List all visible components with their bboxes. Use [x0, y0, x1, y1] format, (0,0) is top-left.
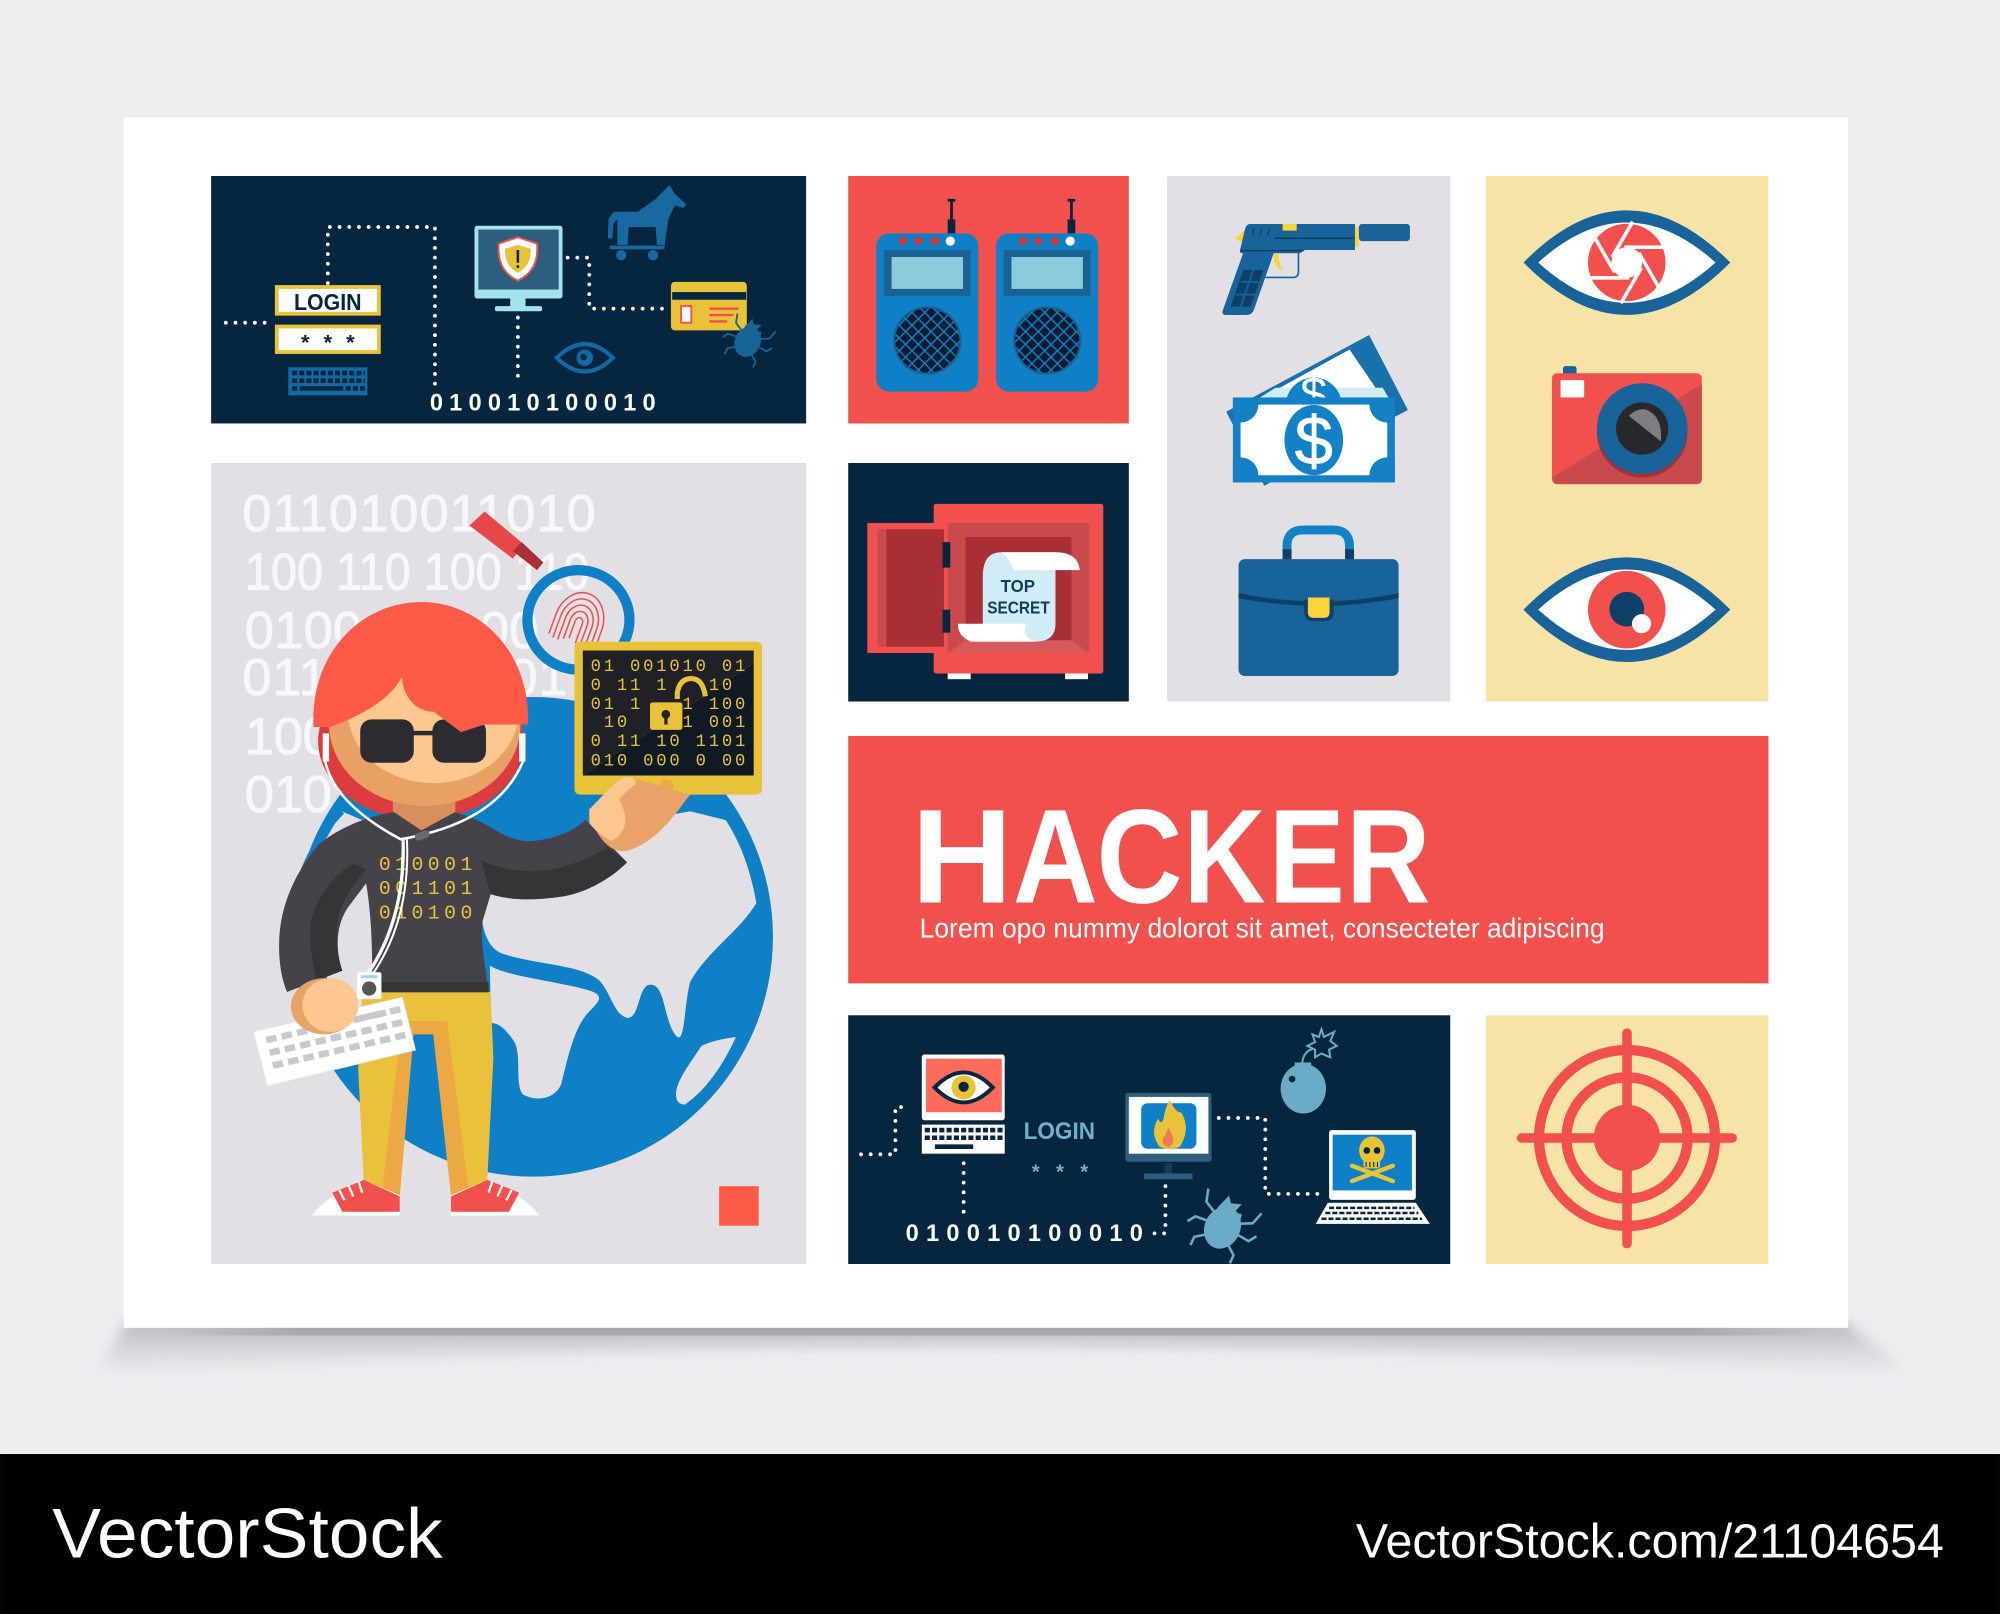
panel: target — [1486, 1015, 1768, 1264]
icon: briefcase — [1239, 530, 1399, 676]
card shadow — [94, 1321, 1913, 1375]
legs — [358, 992, 493, 1196]
hair — [313, 602, 528, 732]
background binary digits: 100 110 100 110 — [245, 543, 589, 601]
panel: safe — [848, 463, 1129, 702]
scroll top secret — [958, 552, 1080, 642]
hoodie binary text: 010001 — [379, 854, 477, 876]
monitor with flame — [1125, 1093, 1211, 1179]
footer bar — [0, 1454, 2000, 1614]
heading: H — [911, 783, 1013, 932]
heading: R — [1346, 781, 1431, 931]
keyboard icon — [288, 367, 367, 395]
white card — [124, 117, 1848, 1328]
monitor with shield — [474, 226, 563, 311]
hoodie binary text: 001101 — [379, 878, 477, 900]
character: hacker — [253, 602, 627, 1216]
safe door — [867, 523, 950, 653]
background binary digits: 010 — [245, 766, 332, 824]
right hand — [589, 777, 690, 851]
icon: credit card — [671, 282, 747, 330]
password field — [277, 327, 379, 354]
face — [329, 640, 520, 806]
icon: bomb — [1281, 1029, 1337, 1113]
binary text: 010010100010 — [430, 390, 656, 416]
heading: K — [1183, 782, 1266, 932]
tablet binary text: 01 1 1 100 — [591, 696, 748, 715]
icon: gun — [1222, 224, 1410, 315]
icon: crosshair target — [1522, 1033, 1732, 1244]
heading: C — [1096, 781, 1182, 931]
background binary digits: 0100100100 — [245, 602, 538, 660]
background binary digits: 100 — [245, 708, 332, 766]
icon: shutter eye — [1523, 210, 1730, 315]
heading — [911, 781, 1431, 932]
mic — [414, 829, 431, 842]
dotted connectors — [861, 1107, 1321, 1233]
icon: trojan horse — [608, 185, 686, 260]
earphones and wire — [323, 733, 526, 974]
neck — [393, 791, 455, 832]
background binary digits — [242, 485, 596, 824]
icon: red iris eye — [1523, 557, 1730, 662]
subtitle: Lorem opo nummy dolorot sit amet, consecteter adipiscing — [920, 912, 1605, 943]
icon: banknotes — [1223, 335, 1408, 493]
left hand — [291, 978, 358, 1034]
shoes — [312, 1180, 539, 1216]
tablet binary text: 010 000 0 00 — [591, 752, 748, 771]
scroll top secret: SECRET — [987, 598, 1050, 618]
login label: LOGIN — [1024, 1118, 1095, 1144]
password asterisks — [1032, 1162, 1088, 1184]
keyboard — [922, 1125, 1005, 1154]
panel: eyes and camera — [1486, 176, 1768, 702]
icon: bug — [1179, 1184, 1267, 1269]
magnifier with fingerprint — [469, 511, 629, 670]
panel: walkie talkies — [848, 176, 1129, 423]
tablet binary text — [591, 658, 748, 771]
skull and crossbones — [1352, 1136, 1393, 1181]
back hair — [318, 662, 524, 820]
binary text: 010010100010 — [906, 1220, 1143, 1246]
password asterisks: * — [1080, 1162, 1088, 1184]
icon: banknotes: $ — [1300, 368, 1327, 422]
password asterisks: * — [1056, 1162, 1064, 1184]
open padlock — [650, 679, 705, 730]
background binary digits: 011010011010 — [242, 485, 596, 543]
login field — [277, 287, 379, 315]
red square — [719, 1186, 759, 1226]
icon: camera — [1552, 366, 1702, 484]
sunglasses — [360, 719, 486, 763]
dotted connectors — [226, 227, 668, 385]
monitor with eye — [922, 1054, 1005, 1120]
footer brand: VectorStock — [52, 1493, 443, 1572]
heading: A — [1013, 782, 1098, 931]
tablet — [574, 642, 762, 795]
footer url: VectorStock.com/21104654 — [1356, 1515, 1944, 1568]
scroll top secret: TOP — [1001, 576, 1035, 596]
safe body — [934, 504, 1103, 679]
panel: spy items — [1167, 176, 1450, 702]
background binary digits: 01101010101 — [242, 649, 568, 707]
globe — [293, 697, 773, 1177]
icon: eye outline — [557, 344, 613, 371]
tablet binary text: 0 11 10 1101 — [591, 733, 748, 752]
tablet binary text: 0 11 1 10 — [591, 677, 735, 696]
keyboard held — [253, 997, 416, 1086]
hoodie — [279, 812, 627, 992]
radio left — [876, 200, 978, 392]
laptop with skull — [1316, 1130, 1430, 1224]
icon: banknotes: $ — [1295, 402, 1333, 479]
heading: E — [1269, 782, 1345, 932]
icon: bug — [716, 310, 780, 371]
login field: LOGIN — [294, 289, 362, 315]
hoodie binary text — [379, 854, 477, 924]
tablet binary text: 01 001010 01 — [591, 658, 748, 677]
hoodie binary text: 010100 — [379, 902, 477, 924]
music player — [357, 972, 381, 999]
panel: cyber attack network — [848, 1015, 1450, 1269]
panel: login network — [211, 176, 806, 423]
radio right — [996, 200, 1098, 392]
tablet binary text: 10 1 001 — [591, 714, 748, 733]
panel: hacker title banner — [848, 736, 1768, 983]
panel: hacker — [211, 463, 806, 1264]
password field: * * * — [301, 329, 355, 354]
password asterisks: * — [1032, 1162, 1040, 1184]
